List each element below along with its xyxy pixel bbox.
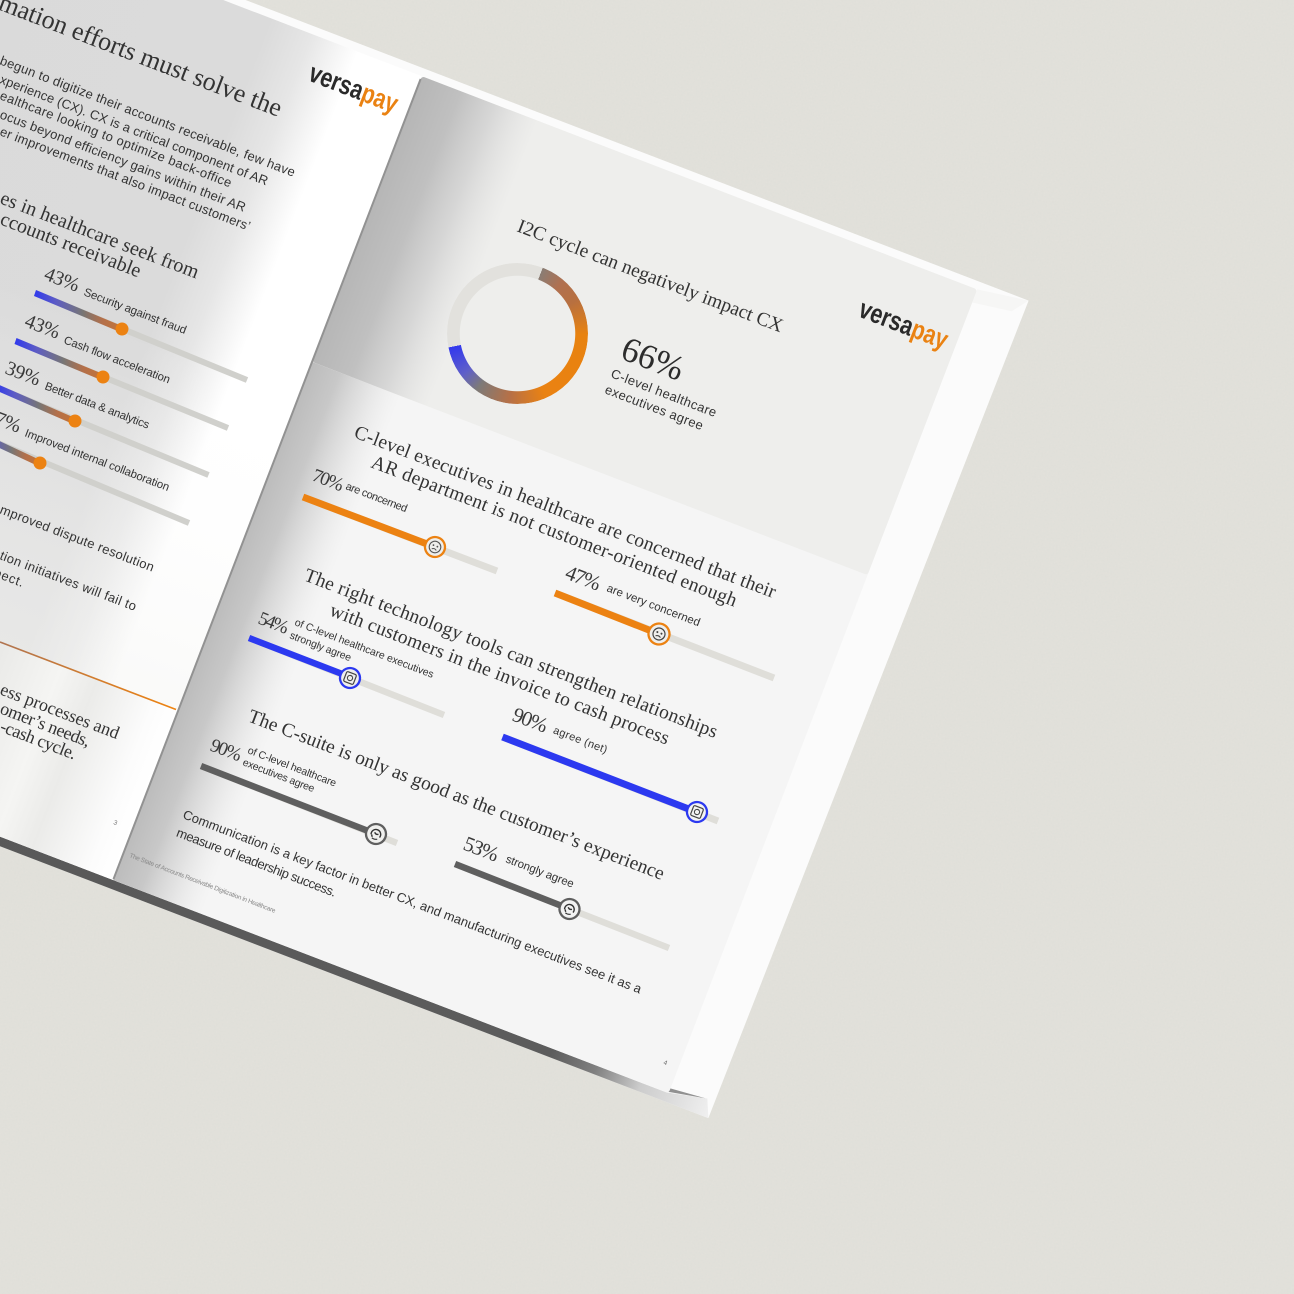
bar: better data and analytics: 39% <box>2 357 44 391</box>
section heading: technology tools: The right technology tools can strengthen relationships <box>301 565 720 743</box>
bar: 90% executives agree <box>201 735 397 847</box>
bar: 47% are very concerned: 47% <box>562 560 604 596</box>
bar: 53% strongly agree: strongly agree <box>504 854 575 891</box>
bar: cash flow acceleration: 43% <box>22 310 63 344</box>
left page chart heading: ccounts receivable <box>0 208 144 282</box>
top panel <box>312 76 977 575</box>
bar: security against fraud: 43% <box>41 263 83 297</box>
section heading: C-suite: The C-suite is only as good as the customer’s experience <box>245 706 667 885</box>
bar: 54% strongly agree: of C-level healthcare executives <box>293 617 435 681</box>
section heading: technology tools: with customers in the invoice to cash process <box>327 600 672 749</box>
bar: security against fraud <box>34 263 247 380</box>
bar: 90% agree net: 90% <box>509 702 551 738</box>
bar: 70% are concerned: are concerned <box>344 481 409 515</box>
communication note: measure of leadership success. <box>174 825 339 900</box>
icon: tablet <box>337 665 363 691</box>
left page body paragraph: er improvements that also impact customers’ <box>0 124 253 234</box>
bar: cash flow acceleration: Cash flow acceleration <box>62 335 172 386</box>
left page conclusion: omer’s needs, <box>0 698 93 751</box>
donut stat: executives agree <box>603 382 705 433</box>
icon: worried face <box>422 534 448 560</box>
left page chart heading: es in healthcare seek from <box>0 187 202 283</box>
left page closing text: tion initiatives will fail to <box>0 548 139 614</box>
bar: 54% strongly agree: strongly agree <box>288 630 353 664</box>
left page row: improved dispute resolution: mproved dispute resolution <box>0 502 156 575</box>
bar: 90% agree net <box>502 702 718 825</box>
left page conclusion: ess processes and <box>0 679 122 743</box>
bar: 54% strongly agree <box>249 608 444 715</box>
bar: 47% are very concerned <box>555 560 774 678</box>
left page body paragraph: begun to digitize their accounts receivable, few have <box>0 53 297 180</box>
left page logo: versapay <box>305 58 402 119</box>
top panel heading: I2C cycle can negatively impact CX <box>514 216 786 337</box>
bar: 90% executives agree: executives agree <box>241 757 316 795</box>
page number 3: 3 <box>112 819 119 827</box>
bar: 70% are concerned <box>303 465 497 571</box>
bar: better data and analytics: Better data & analytics <box>43 381 151 432</box>
donut chart <box>447 262 588 404</box>
bar: 90% executives agree: of C-level healthcare <box>246 745 338 790</box>
book cover <box>0 0 1029 1120</box>
bar: 47% are very concerned: are very concerned <box>605 583 702 629</box>
bar: 90% agree net: agree (net) <box>551 725 609 756</box>
donut stat <box>603 329 719 433</box>
bar: improved internal collaboration: Improved internal collaboration <box>23 428 171 494</box>
bar: 70% are concerned: 70% <box>309 465 347 496</box>
bar: better data and analytics <box>0 357 208 475</box>
bar: cash flow acceleration <box>14 310 228 428</box>
icon: person <box>557 896 582 922</box>
donut stat: 66% <box>616 329 690 388</box>
section heading: concern: AR department is not customer-oriented enough <box>368 452 740 612</box>
page number 4: 4 <box>662 1059 669 1067</box>
left page <box>0 0 422 880</box>
icon: tablet <box>684 799 710 825</box>
bar: improved internal collaboration <box>0 404 189 523</box>
bar: security against fraud: Security against fraud <box>82 287 188 337</box>
orange divider <box>0 642 176 710</box>
left page body paragraph: xperience (CX). CX is a critical component of AR <box>0 72 270 188</box>
right page logo: versapay <box>855 294 952 355</box>
left page body paragraph: ealthcare looking to optimize back-office <box>0 88 234 190</box>
communication note: Communication is a key factor in better CX, and manufacturing executives see it as a <box>181 807 644 997</box>
right page <box>113 76 977 1093</box>
bar: 90% executives agree: 90% <box>207 735 245 766</box>
footer text: The State of Accounts Receivable Digitization in Healthcare <box>128 852 277 915</box>
bar: 53% strongly agree: 53% <box>460 831 502 867</box>
left page body paragraph: ocus beyond efficiency gains within their AR <box>0 107 248 215</box>
donut stat: C-level healthcare <box>609 366 719 420</box>
left page conclusion: -cash cycle. <box>0 716 79 763</box>
icon: worried face <box>645 620 673 648</box>
cover bottom edge shadow <box>0 613 715 1118</box>
bar: 54% strongly agree: 54% <box>255 608 292 639</box>
section heading: concern: C-level executives in healthcare are concerned that their <box>351 422 779 603</box>
bar: 53% strongly agree <box>455 831 669 948</box>
icon: person <box>363 821 389 847</box>
